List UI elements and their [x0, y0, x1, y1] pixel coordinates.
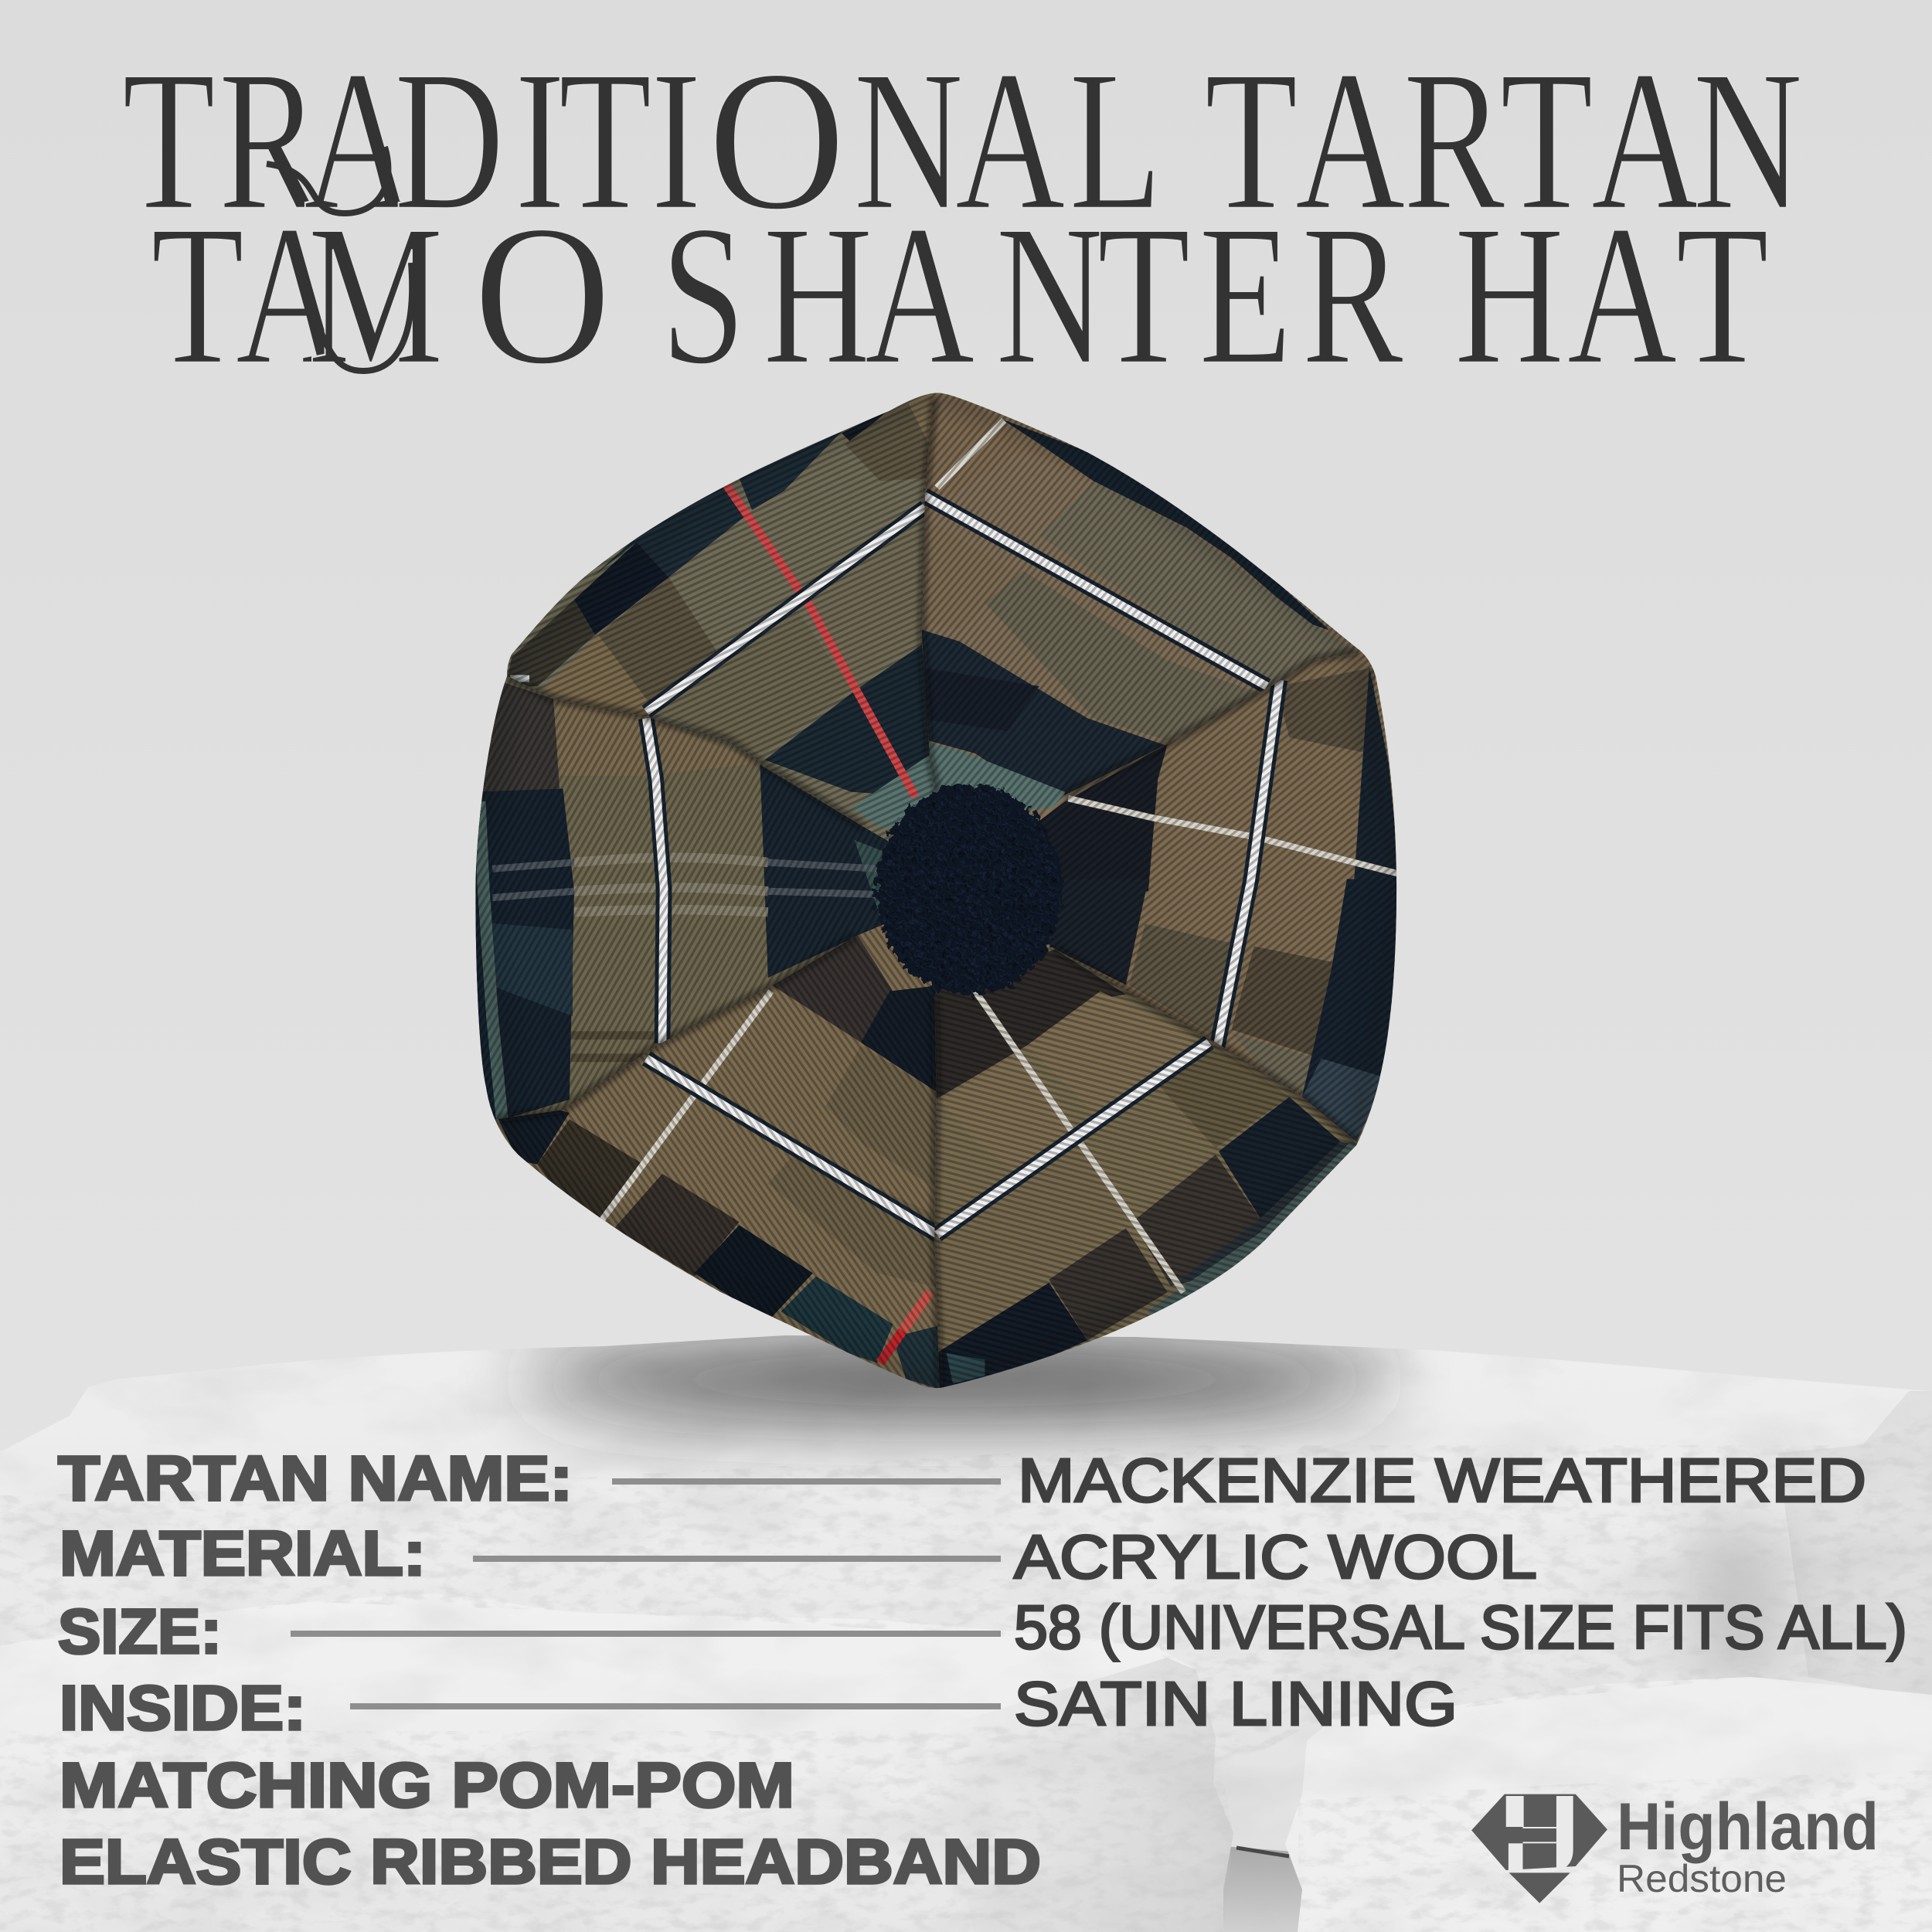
stone plinths [0, 1335, 1932, 1932]
logo wordmark Redstone: Redstone [1617, 1857, 1787, 1900]
red stripe [903, 1292, 930, 1331]
row: inside: SATIN LINING [1014, 1669, 1458, 1738]
lower dark stripes [571, 1036, 655, 1058]
row: material [60, 1519, 1537, 1591]
panel: top right [921, 393, 1362, 821]
rim shading [475, 393, 1396, 1387]
tartan hat [464, 379, 1425, 1404]
white stripe [646, 718, 664, 1043]
panel: right [944, 628, 1425, 1179]
front left rock side face [927, 1658, 1233, 1932]
stone mottling [0, 1337, 1932, 1932]
hat shadow on stone [522, 1347, 1387, 1412]
teal thin stripe [480, 801, 502, 1119]
thin stripe [975, 992, 1183, 1292]
logo wordmark Highland: Highland [1617, 1790, 1879, 1864]
row: tartan name [58, 1444, 1866, 1515]
white stripe [646, 1059, 938, 1235]
white stripe [1217, 680, 1280, 1046]
title [122, 29, 1803, 406]
row: inside: INSIDE: [60, 1673, 306, 1743]
row: size: 58 (UNIVERSAL SIZE FITS ALL) [1014, 1593, 1907, 1662]
seam creases [495, 398, 1356, 1385]
title flourish AM [311, 263, 412, 371]
row: tartan name: TARTAN NAME: [58, 1444, 573, 1514]
front right rock [1285, 1677, 1932, 1932]
row: size: SIZE: [58, 1597, 222, 1667]
white stitching spot [510, 675, 529, 682]
row: inside [60, 1669, 1458, 1743]
row: material: MATERIAL: [60, 1519, 426, 1589]
row: size [58, 1593, 1907, 1667]
panel: bottom left [464, 907, 951, 1404]
white stripe [924, 495, 1267, 686]
row: tartan name: MACKENZIE WEATHERED [1018, 1446, 1866, 1515]
white stripe [937, 1043, 1209, 1235]
row: material: ACRYLIC WOOL [1014, 1522, 1537, 1591]
front left rock [0, 1594, 1233, 1932]
rim teal stripe [1151, 1145, 1356, 1316]
title line 2: TAM O SHANTER HAT [151, 183, 1769, 406]
specification list [58, 1444, 1907, 1897]
logo [1471, 1790, 1879, 1903]
floor gap dark line [1236, 1848, 1289, 1856]
title flourish RA [267, 147, 388, 213]
panel: bottom right [921, 939, 1409, 1404]
feature: matching pom-pom: MATCHING POM-POM [60, 1750, 794, 1821]
white stripe [646, 507, 925, 712]
thin top stripe [937, 420, 1004, 488]
panel: top left [507, 393, 934, 842]
floor gap [1213, 1845, 1314, 1932]
red stripe [725, 483, 916, 797]
horizontal stripes [574, 858, 768, 912]
panel: left [464, 667, 976, 1148]
back rock side shading [1685, 1515, 1793, 1685]
back rock [0, 1335, 1932, 1932]
feature: elastic ribbed headband: ELASTIC RIBBED HEADBAND [60, 1827, 1041, 1897]
pom-pom [876, 784, 1063, 995]
stone texture [0, 1414, 1932, 1932]
thin stripe [598, 992, 771, 1225]
title line 1: TRADITIONAL TARTAN [122, 29, 1803, 251]
back rock edge [1777, 1391, 1932, 1700]
icon: logo mark [1471, 1794, 1607, 1903]
thin cross stripe [1068, 798, 1398, 873]
